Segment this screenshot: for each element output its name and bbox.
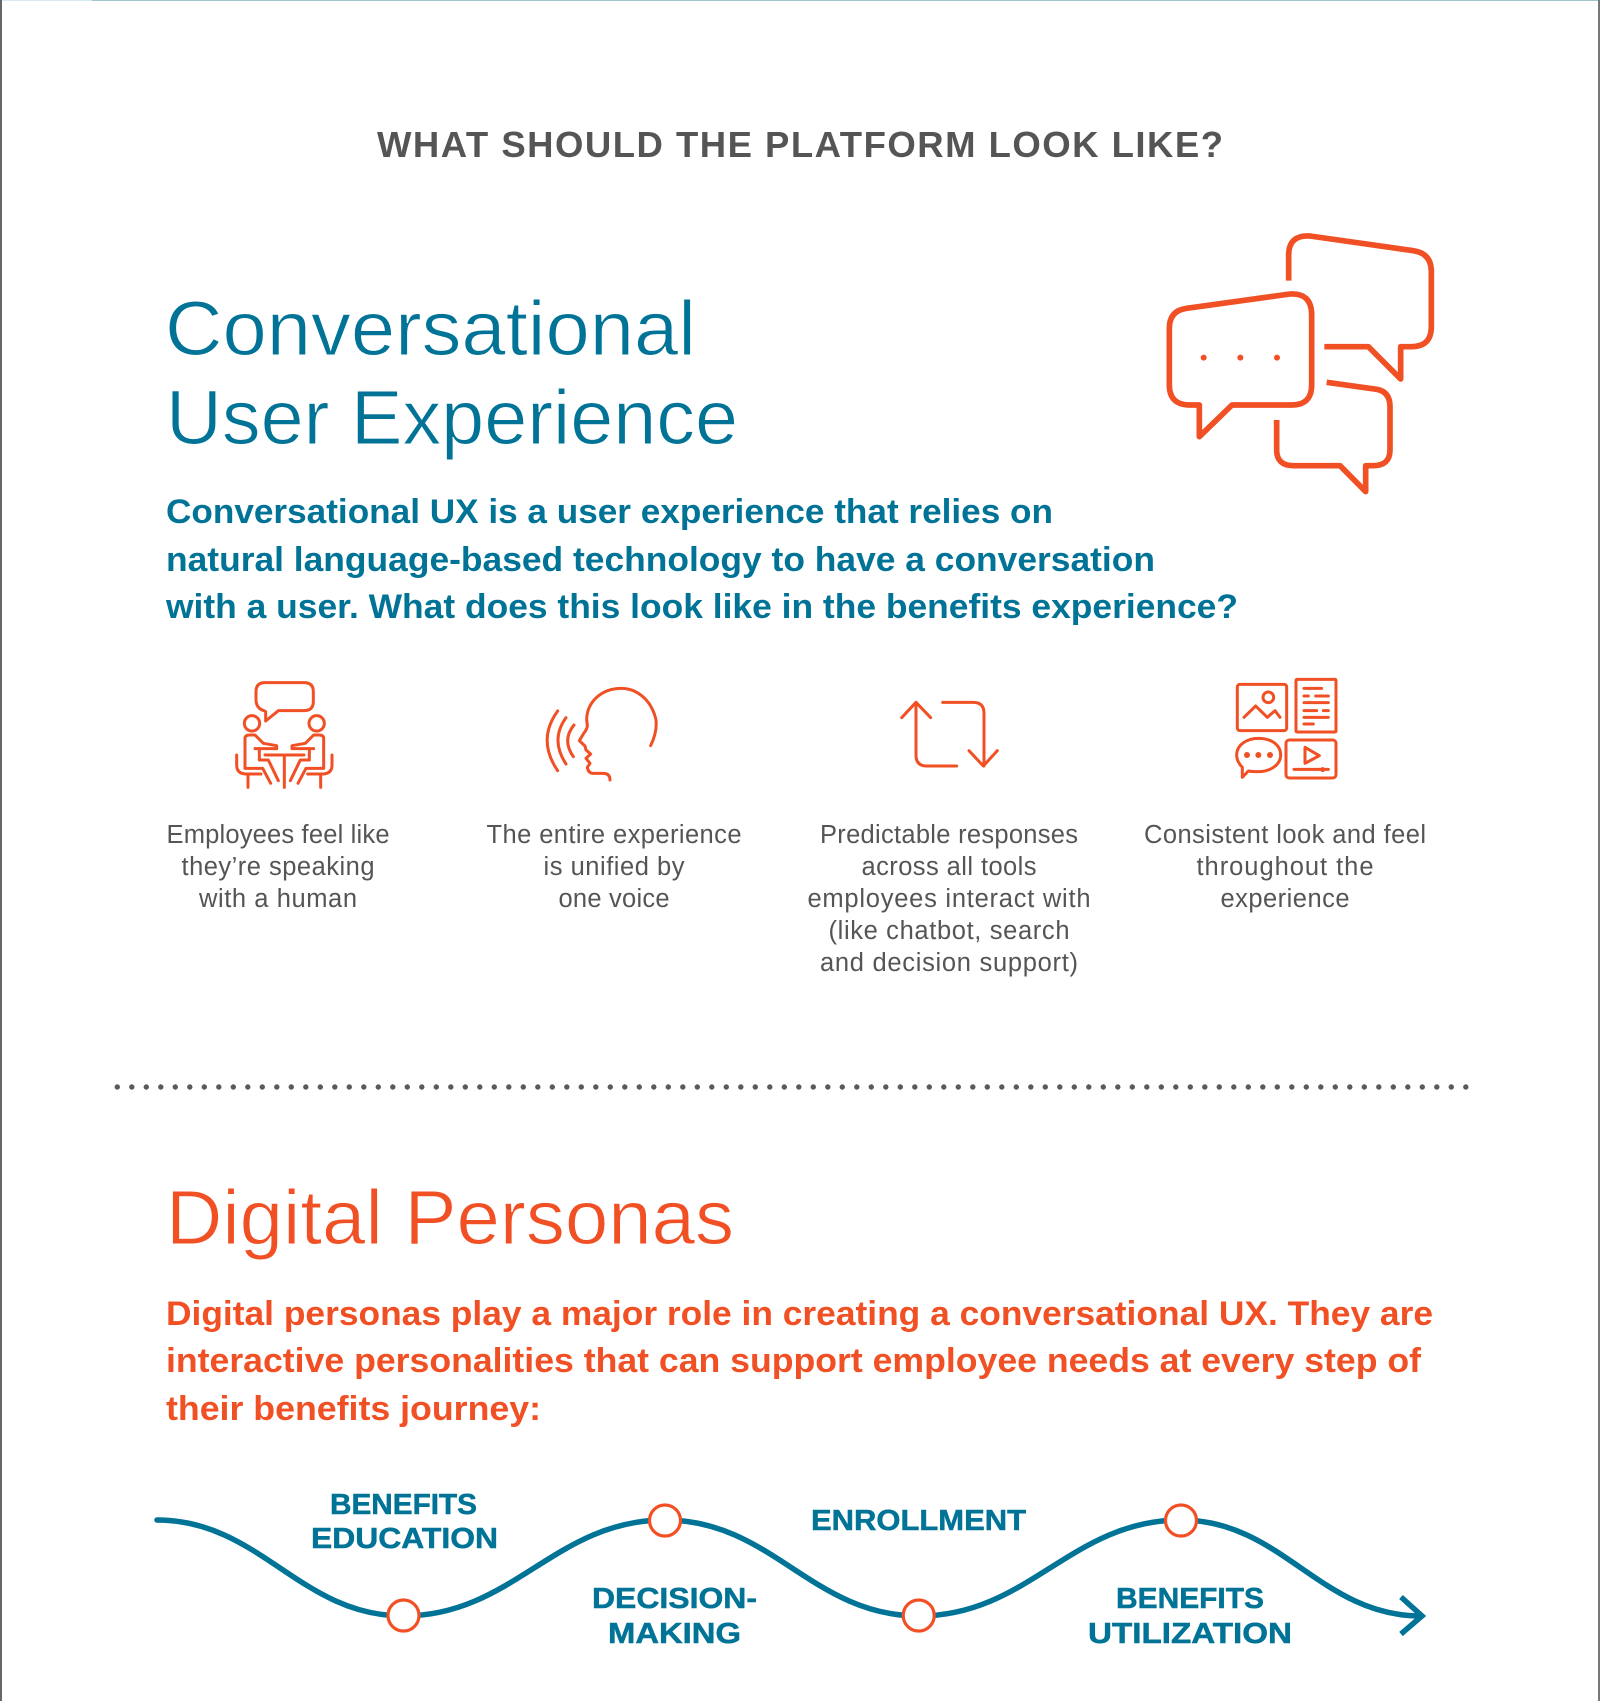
heading: conversational user experience: User Experience	[166, 375, 738, 461]
caption: consistent look and feel: experience	[1220, 885, 1350, 913]
caption: consistent look and feel: throughout the	[1196, 853, 1374, 881]
text block: digital personas definition	[166, 1295, 1433, 1428]
caption: unified by one voice: The entire experience	[486, 821, 742, 849]
chart: benefits journey wave with arrow	[157, 1505, 1422, 1634]
icon: three speech bubbles	[1169, 236, 1431, 492]
caption: predictable responses: Predictable responses	[820, 821, 1078, 849]
text block: conversational UX definition: Conversational UX is a user experience that relies on	[166, 493, 1053, 531]
icon: two people talking at a table	[237, 683, 332, 787]
label: benefits utilization: UTILIZATION	[1088, 1618, 1292, 1650]
icon: image, document, chat and video tiles	[1237, 679, 1336, 778]
caption: speaking with a human	[166, 821, 390, 913]
caption: predictable responses: across all tools	[862, 853, 1036, 881]
label: decision-making: MAKING	[608, 1618, 741, 1650]
heading: digital personas: Digital Personas	[166, 1175, 734, 1261]
icon: two arrows in a loop	[902, 702, 997, 766]
caption: predictable responses: and decision support)	[820, 949, 1078, 977]
text block: conversational UX definition: with a user. What does this look like in the benefits experience?	[165, 588, 1238, 626]
caption: speaking with a human: with a human	[198, 885, 357, 913]
heading: conversational user experience: Conversational	[165, 286, 696, 372]
caption: consistent look and feel	[1144, 821, 1426, 913]
caption: speaking with a human: they’re speaking	[182, 853, 374, 881]
label: benefits utilization	[1088, 1583, 1292, 1650]
heading: conversational user experience	[165, 286, 738, 461]
panel: digital personas	[157, 1175, 1433, 1650]
text block: digital personas definition: Digital personas play a major role in creating a conversational UX. They are	[166, 1295, 1433, 1333]
arrowhead	[1401, 1597, 1422, 1634]
label: benefits utilization: BENEFITS	[1116, 1583, 1264, 1615]
milestone markers	[388, 1505, 1196, 1631]
text block: digital personas definition: their benefits journey:	[166, 1390, 541, 1428]
label: decision-making: DECISION-	[592, 1583, 757, 1615]
label: benefits education: EDUCATION	[311, 1523, 498, 1555]
text block: conversational UX definition: natural language-based technology to have a conversation	[166, 541, 1155, 579]
caption: speaking with a human: Employees feel like	[166, 821, 390, 849]
icon: head speaking with one voice	[547, 688, 656, 780]
panel: conversational user experience	[165, 236, 1431, 977]
caption: predictable responses: employees interact with	[808, 885, 1090, 913]
label: benefits education: BENEFITS	[330, 1489, 477, 1521]
label: decision-making	[592, 1583, 757, 1650]
title: what should the platform look like: WHAT SHOULD THE PLATFORM LOOK LIKE?	[377, 124, 1223, 165]
text block: conversational UX definition	[165, 493, 1238, 626]
caption: predictable responses: (like chatbot, search	[828, 917, 1070, 945]
caption: consistent look and feel: Consistent look and feel	[1144, 821, 1426, 849]
caption: predictable responses	[808, 821, 1090, 977]
caption: unified by one voice: one voice	[558, 885, 670, 913]
label: benefits education	[311, 1489, 498, 1555]
text block: digital personas definition: interactive personalities that can support employee needs at every step of	[166, 1342, 1422, 1380]
caption: unified by one voice: is unified by	[544, 853, 685, 881]
caption: unified by one voice	[486, 821, 742, 913]
label: enrollment: ENROLLMENT	[811, 1505, 1026, 1537]
